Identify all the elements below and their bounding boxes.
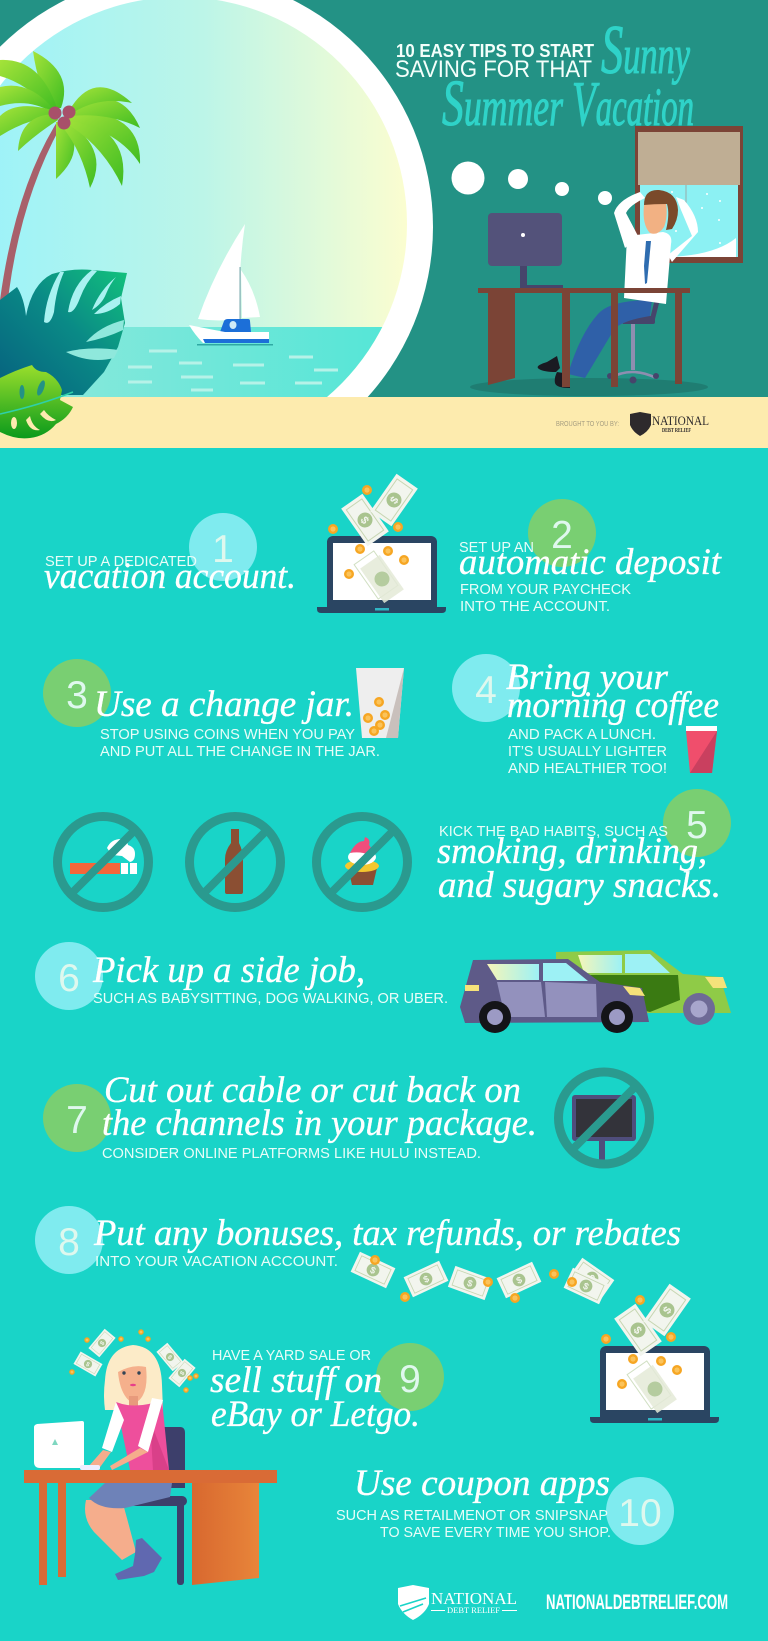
small text line 2: IT’S USUALLY LIGHTER bbox=[508, 743, 667, 760]
script word vacation: Vacation bbox=[572, 68, 694, 139]
sailboat bbox=[189, 224, 273, 346]
number badge 4 bbox=[452, 654, 520, 722]
number 2: 2 bbox=[551, 514, 573, 557]
sponsor label: BROUGHT TO YOU BY: bbox=[556, 419, 619, 428]
tip 2 bbox=[459, 499, 723, 615]
face bbox=[644, 198, 667, 234]
script text: Use a change jar. bbox=[94, 684, 354, 725]
logo subtitle dark: DEBT RELIEF bbox=[662, 427, 691, 434]
script text line 2: eBay or Letgo. bbox=[211, 1394, 420, 1435]
brought to you by logo bbox=[556, 412, 709, 436]
icon: flying money bbox=[351, 1252, 614, 1304]
tip 9 bbox=[210, 1343, 444, 1435]
number badge 8 bbox=[35, 1206, 103, 1274]
script text: Cut out cable or cut back on bbox=[104, 1070, 521, 1111]
large teal monstera leaf bbox=[0, 270, 127, 395]
icon: no sugary snacks bbox=[316, 816, 408, 908]
icon: second laptop with money bbox=[590, 1284, 719, 1423]
sea bbox=[61, 327, 382, 397]
logo shield dark bbox=[630, 412, 651, 436]
small green monstera leaf bbox=[0, 365, 73, 438]
tie bbox=[644, 241, 651, 284]
hair bbox=[104, 1345, 163, 1410]
arms bbox=[102, 1398, 163, 1452]
tip 7 bbox=[43, 1070, 537, 1162]
left arm bbox=[614, 192, 645, 248]
small text line 2: FROM YOUR PAYCHECK bbox=[460, 581, 631, 598]
small text: AND PACK A LUNCH. bbox=[508, 726, 656, 743]
footer logo rules bbox=[431, 1610, 517, 1612]
hair bbox=[644, 190, 678, 230]
script word summer: Summer bbox=[442, 67, 564, 140]
tip 3 bbox=[43, 659, 380, 760]
shoes bbox=[538, 356, 570, 388]
script word sunny: Sunny bbox=[601, 12, 690, 89]
header background bbox=[0, 0, 768, 397]
number 5: 5 bbox=[686, 804, 708, 847]
title line two: SAVING FOR THAT bbox=[395, 56, 592, 83]
small text: INTO YOUR VACATION ACCOUNT. bbox=[95, 1253, 338, 1270]
palm tree bbox=[0, 51, 140, 330]
number 9: 9 bbox=[399, 1358, 421, 1401]
number badge 10 bbox=[606, 1477, 674, 1545]
skirt bbox=[89, 1483, 172, 1508]
man relaxing bbox=[538, 190, 698, 388]
tip 1 bbox=[44, 513, 296, 597]
tip 4 bbox=[452, 654, 719, 777]
script text: vacation account. bbox=[44, 556, 296, 597]
water ripples bbox=[128, 350, 338, 392]
title line one: 10 EASY TIPS TO START bbox=[396, 40, 595, 61]
small text: SET UP A DEDICATED bbox=[45, 553, 197, 570]
header banner bbox=[0, 0, 768, 481]
icon: no smoking bbox=[58, 816, 148, 908]
small text: SET UP AN bbox=[459, 539, 534, 556]
number badge 2 bbox=[528, 499, 596, 567]
script text: sell stuff on bbox=[210, 1360, 382, 1401]
neck bbox=[129, 1396, 138, 1406]
small text line 2: AND PUT ALL THE CHANGE IN THE JAR. bbox=[100, 743, 380, 760]
desk pedestal bbox=[192, 1483, 259, 1585]
desk legs bbox=[39, 1483, 66, 1585]
sand strip bbox=[0, 397, 768, 448]
number badge 6 bbox=[35, 942, 103, 1010]
small text: SUCH AS RETAILMENOT OR SNIPSNAP bbox=[336, 1507, 608, 1524]
icon: purple car bbox=[460, 959, 649, 1033]
small text line 2: TO SAVE EVERY TIME YOU SHOP. bbox=[380, 1524, 611, 1541]
sandal bbox=[115, 1538, 162, 1580]
icon: laptop with money bbox=[317, 474, 446, 613]
footer logo name: NATIONAL bbox=[431, 1589, 517, 1608]
money around head bbox=[69, 1329, 199, 1393]
icon: green car bbox=[556, 950, 731, 1025]
script text line 2: morning coffee bbox=[507, 685, 719, 726]
script text: Put any bonuses, tax refunds, or rebates bbox=[93, 1213, 681, 1254]
small text: KICK THE BAD HABITS, SUCH AS bbox=[439, 823, 668, 840]
desk bbox=[478, 288, 690, 387]
number badge 5 bbox=[663, 789, 731, 857]
number 3: 3 bbox=[66, 674, 88, 717]
small text: HAVE A YARD SALE OR bbox=[212, 1347, 371, 1364]
desk top bbox=[24, 1470, 277, 1483]
number 1: 1 bbox=[212, 528, 234, 571]
small text: CONSIDER ONLINE PLATFORMS LIKE HULU INSTEAD. bbox=[102, 1145, 481, 1162]
footer bbox=[398, 1585, 728, 1620]
number badge 1 bbox=[189, 513, 257, 581]
script text: smoking, drinking, bbox=[437, 831, 707, 872]
woman at desk bbox=[24, 1329, 277, 1585]
number 7: 7 bbox=[66, 1099, 88, 1142]
thought bubbles bbox=[452, 162, 612, 205]
icon: coffee cup bbox=[686, 726, 717, 773]
title bbox=[395, 12, 694, 140]
number 10: 10 bbox=[618, 1492, 662, 1535]
script text: Bring your bbox=[506, 657, 669, 698]
legs bbox=[85, 1500, 136, 1560]
script text: automatic deposit bbox=[459, 542, 723, 583]
icon: no cable tv bbox=[558, 1072, 650, 1164]
script text: Pick up a side job, bbox=[92, 950, 365, 991]
script text: Use coupon apps bbox=[354, 1463, 610, 1504]
small text line 3: AND HEALTHIER TOO! bbox=[508, 760, 667, 777]
script text line 2: the channels in your package. bbox=[102, 1103, 537, 1144]
floor shadow bbox=[470, 378, 708, 396]
logo name dark: NATIONAL bbox=[652, 413, 709, 428]
number badge 7 bbox=[43, 1084, 111, 1152]
face bbox=[118, 1366, 147, 1403]
small text: STOP USING COINS WHEN YOU PAY bbox=[100, 726, 355, 743]
eyes and lips bbox=[122, 1371, 141, 1386]
icon: change jar bbox=[356, 668, 404, 738]
tip 6 bbox=[35, 942, 448, 1010]
small text: SUCH AS BABYSITTING, DOG WALKING, OR UBER. bbox=[93, 990, 448, 1007]
dress bbox=[116, 1400, 169, 1470]
office chair bbox=[607, 262, 669, 384]
trousers bbox=[568, 300, 652, 378]
footer shield logo bbox=[398, 1585, 429, 1620]
right arm bbox=[668, 197, 698, 262]
shirt bbox=[624, 232, 671, 304]
number badge 3 bbox=[43, 659, 111, 727]
tip 10 bbox=[336, 1463, 674, 1545]
chair bbox=[130, 1427, 187, 1585]
window bbox=[635, 126, 743, 263]
monitor bbox=[488, 213, 563, 288]
laptop bbox=[34, 1421, 100, 1470]
white circle frame bbox=[0, 0, 433, 397]
number 8: 8 bbox=[58, 1221, 80, 1264]
number 6: 6 bbox=[58, 957, 80, 1000]
number badge 9 bbox=[376, 1343, 444, 1411]
tip 5 bbox=[437, 789, 731, 906]
small text line 3: INTO THE ACCOUNT. bbox=[460, 598, 610, 615]
icon: no drinking bbox=[190, 816, 280, 908]
footer logo subtitle: DEBT RELIEF bbox=[447, 1606, 501, 1615]
number 4: 4 bbox=[475, 669, 497, 712]
tip 8 bbox=[35, 1206, 681, 1274]
script text line 2: and sugary snacks. bbox=[438, 865, 721, 906]
